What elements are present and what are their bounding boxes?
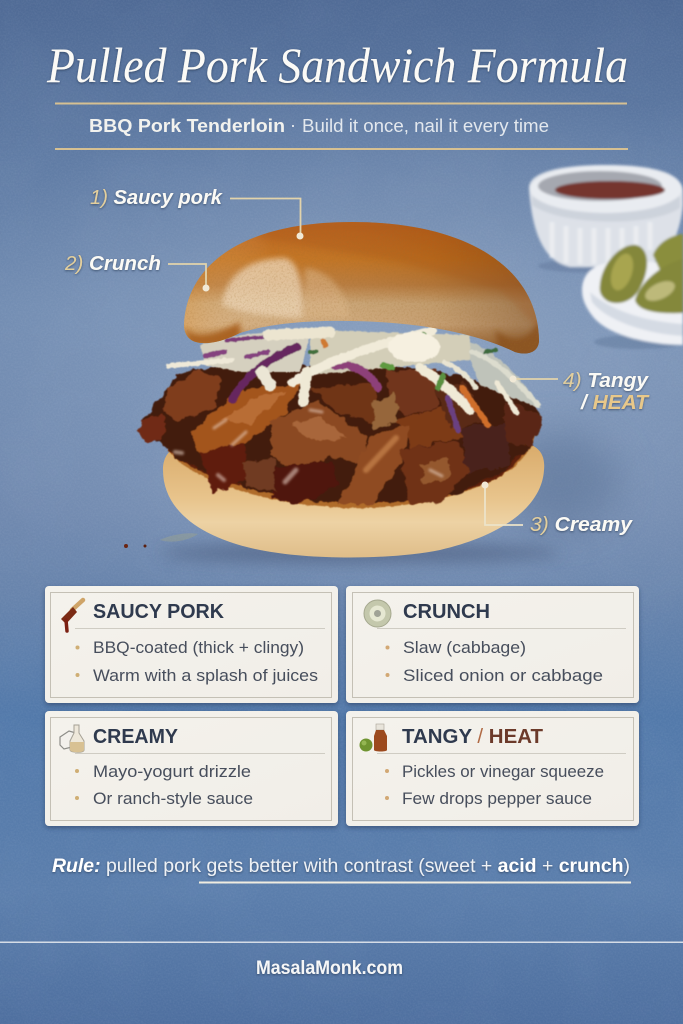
callout: 4 tangy / heat: / HEAT bbox=[580, 392, 650, 414]
bottom bun bbox=[163, 425, 544, 558]
panel: tangy / heat bbox=[346, 711, 639, 826]
bullet list: Pickles or vinegar squeeze bbox=[402, 762, 604, 781]
side dishes: sauce ramekin and pickles bbox=[529, 165, 683, 349]
pickle dish bbox=[582, 234, 683, 349]
callout: 2 crunch: 2) Crunch bbox=[64, 253, 161, 275]
rule line: Rule: pulled pork gets better with contrast (sweet + acid + crunch) bbox=[52, 856, 630, 877]
subtitle block with gold rules bbox=[55, 102, 628, 150]
bullet list bbox=[75, 762, 253, 808]
subtitle block with gold rules: BBQ Pork Tenderloin bbox=[89, 116, 285, 136]
meat gloss highlights bbox=[175, 410, 442, 482]
heading: CRUNCH bbox=[403, 601, 490, 623]
callout: 2 crunch bbox=[64, 253, 210, 292]
panel: saucy pork bbox=[45, 586, 338, 703]
subtitle block with gold rules: Build it once, nail it every time bbox=[302, 116, 549, 136]
panel: creamy bbox=[45, 711, 338, 826]
ramekin with sauce bbox=[529, 165, 683, 273]
callout: 3 creamy: 3) Creamy bbox=[530, 514, 633, 536]
bullet list bbox=[385, 762, 604, 808]
heading: CREAMY bbox=[93, 726, 179, 748]
bullet list: Slaw (cabbage) bbox=[403, 638, 526, 657]
icon: pepper sauce bottle and lime bbox=[360, 724, 387, 752]
top bun bbox=[184, 222, 545, 357]
callout: 3 creamy bbox=[482, 482, 633, 536]
slaw bbox=[168, 330, 541, 430]
heading: SAUCY PORK bbox=[93, 601, 225, 623]
subtitle block with gold rules: · bbox=[290, 115, 296, 135]
callout: 4 tangy / heat: 4) Tangy bbox=[563, 370, 649, 392]
bullet list: Mayo-yogurt drizzle bbox=[93, 762, 251, 781]
sandwich illustration bbox=[139, 222, 545, 558]
sandwich shadow bbox=[124, 430, 620, 562]
icon: basting brush bbox=[61, 600, 83, 631]
icon: glass and bottle bbox=[60, 725, 84, 752]
title: Pulled Pork Sandwich Formula bbox=[46, 37, 628, 93]
bullet list bbox=[386, 638, 603, 685]
callout: 1 saucy pork: 1) Saucy pork bbox=[90, 187, 223, 209]
bullet list: Sliced onion or cabbage bbox=[403, 666, 603, 685]
callout: 1 saucy pork bbox=[90, 187, 304, 240]
footer brand: MasalaMonk.com bbox=[256, 958, 403, 979]
bullet list bbox=[76, 638, 318, 685]
heading: TANGY / HEAT bbox=[402, 726, 543, 748]
bullet list: Or ranch-style sauce bbox=[93, 789, 253, 808]
bullet list: Warm with a splash of juices bbox=[93, 666, 318, 685]
callout: 4 tangy / heat bbox=[510, 370, 650, 414]
panel: crunch bbox=[346, 586, 639, 703]
bullet list: Few drops pepper sauce bbox=[402, 789, 592, 808]
icon: cabbage slice bbox=[364, 600, 391, 627]
footer divider bbox=[0, 942, 683, 943]
bullet list: BBQ-coated (thick + clingy) bbox=[93, 638, 304, 657]
pulled pork bbox=[139, 364, 542, 504]
